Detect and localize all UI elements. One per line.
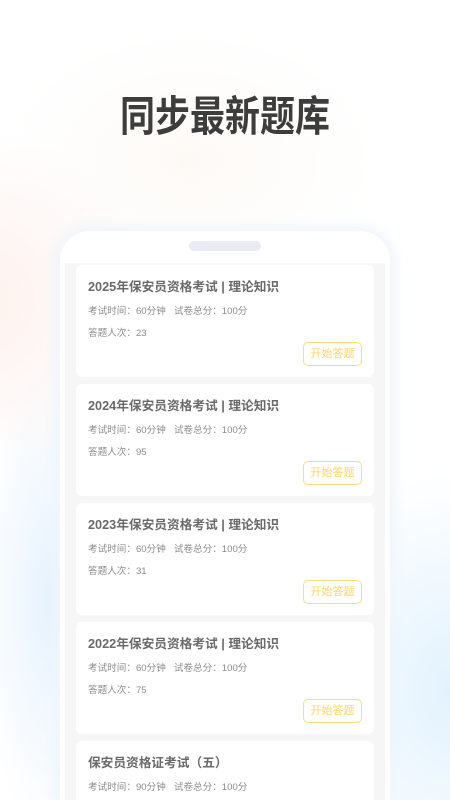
exam details: 考试时间：90分钟 试卷总分：100分	[88, 782, 247, 793]
card: certificate exam 5	[76, 741, 374, 800]
card title: 2024年保安员资格考试 | 理论知识	[88, 399, 279, 413]
start button	[303, 342, 362, 366]
start button	[303, 580, 362, 604]
card: 2024 exam	[76, 384, 374, 496]
exam details: 考试时间：60分钟 试卷总分：100分	[88, 544, 247, 555]
card title: 保安员资格证考试（五）	[88, 756, 228, 770]
card: 2023 exam	[76, 503, 374, 615]
start button: 开始答题	[310, 586, 354, 598]
start button: 开始答题	[310, 348, 354, 360]
panel: phone mockup	[60, 231, 390, 800]
card title: 2025年保安员资格考试 | 理论知识	[88, 280, 279, 294]
attempt count: 答题人次：75	[88, 685, 147, 696]
attempt count: 答题人次：23	[88, 328, 147, 339]
exam details: 考试时间：60分钟 试卷总分：100分	[88, 425, 247, 436]
start button: 开始答题	[310, 705, 354, 717]
card: 2022 exam	[76, 622, 374, 734]
list background	[65, 263, 385, 800]
attempt count: 答题人次：31	[88, 566, 147, 577]
exam details: 考试时间：60分钟 试卷总分：100分	[88, 306, 247, 317]
card: 2025 exam	[76, 265, 374, 377]
start button	[303, 699, 362, 723]
exam details: 考试时间：60分钟 试卷总分：100分	[88, 663, 247, 674]
phone notch	[189, 241, 261, 251]
start button	[303, 461, 362, 485]
title: 同步最新题库	[120, 94, 330, 141]
start button: 开始答题	[310, 467, 354, 479]
attempt count: 答题人次：95	[88, 447, 147, 458]
card title: 2023年保安员资格考试 | 理论知识	[88, 518, 279, 532]
card title: 2022年保安员资格考试 | 理论知识	[88, 637, 279, 651]
